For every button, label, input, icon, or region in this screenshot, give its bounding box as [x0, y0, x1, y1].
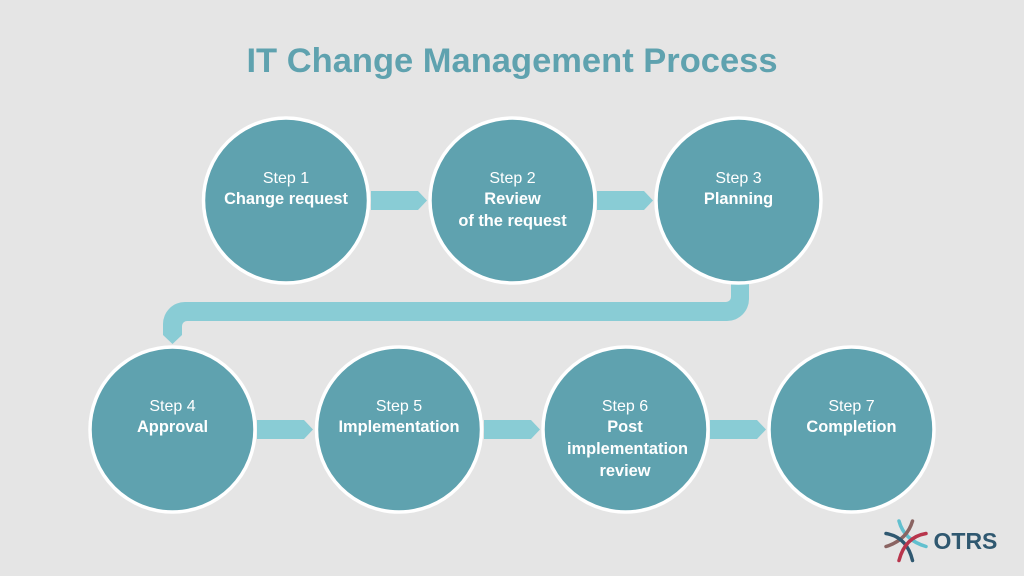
- step 6: implementation: [567, 440, 688, 458]
- icon: OTRS knot: [886, 521, 926, 560]
- step 5: Step 5: [376, 398, 422, 415]
- step 1: Change request: [224, 190, 348, 208]
- arrow: step 6 to step 7: [710, 420, 766, 439]
- step 7: [769, 347, 934, 512]
- step 6: [543, 347, 708, 512]
- OTRS logo: [886, 521, 997, 560]
- step 2: [430, 118, 595, 283]
- step 6: Step 6: [602, 398, 648, 415]
- arrow: step 2 to step 3: [597, 191, 653, 210]
- step 6: review: [599, 462, 651, 480]
- title: IT Change Management Process: [246, 42, 778, 80]
- step 5: Implementation: [338, 418, 460, 436]
- step 2: of the request: [458, 212, 567, 230]
- logo wordmark: OTRS: [934, 528, 997, 554]
- arrow: step 5 to step 6: [484, 420, 540, 439]
- step 3: [656, 118, 821, 283]
- step 3: Step 3: [715, 170, 762, 187]
- step 4: Step 4: [149, 398, 196, 415]
- arrow: step 1 to step 2: [371, 191, 427, 210]
- step 1: [204, 118, 368, 283]
- step 2: Step 2: [489, 170, 536, 187]
- step 4: Approval: [137, 418, 208, 436]
- step 5: [316, 347, 482, 512]
- arrow: step 4 to step 5: [257, 420, 313, 439]
- step 7: Step 7: [828, 398, 875, 415]
- step 7: Completion: [806, 418, 897, 436]
- step 3: Planning: [704, 190, 773, 208]
- arrow: step 3 to step 4: [163, 280, 749, 344]
- step 2: Review: [484, 190, 541, 208]
- step 4: [90, 347, 255, 512]
- step 6: Post: [607, 418, 643, 436]
- step 1: Step 1: [263, 170, 309, 187]
